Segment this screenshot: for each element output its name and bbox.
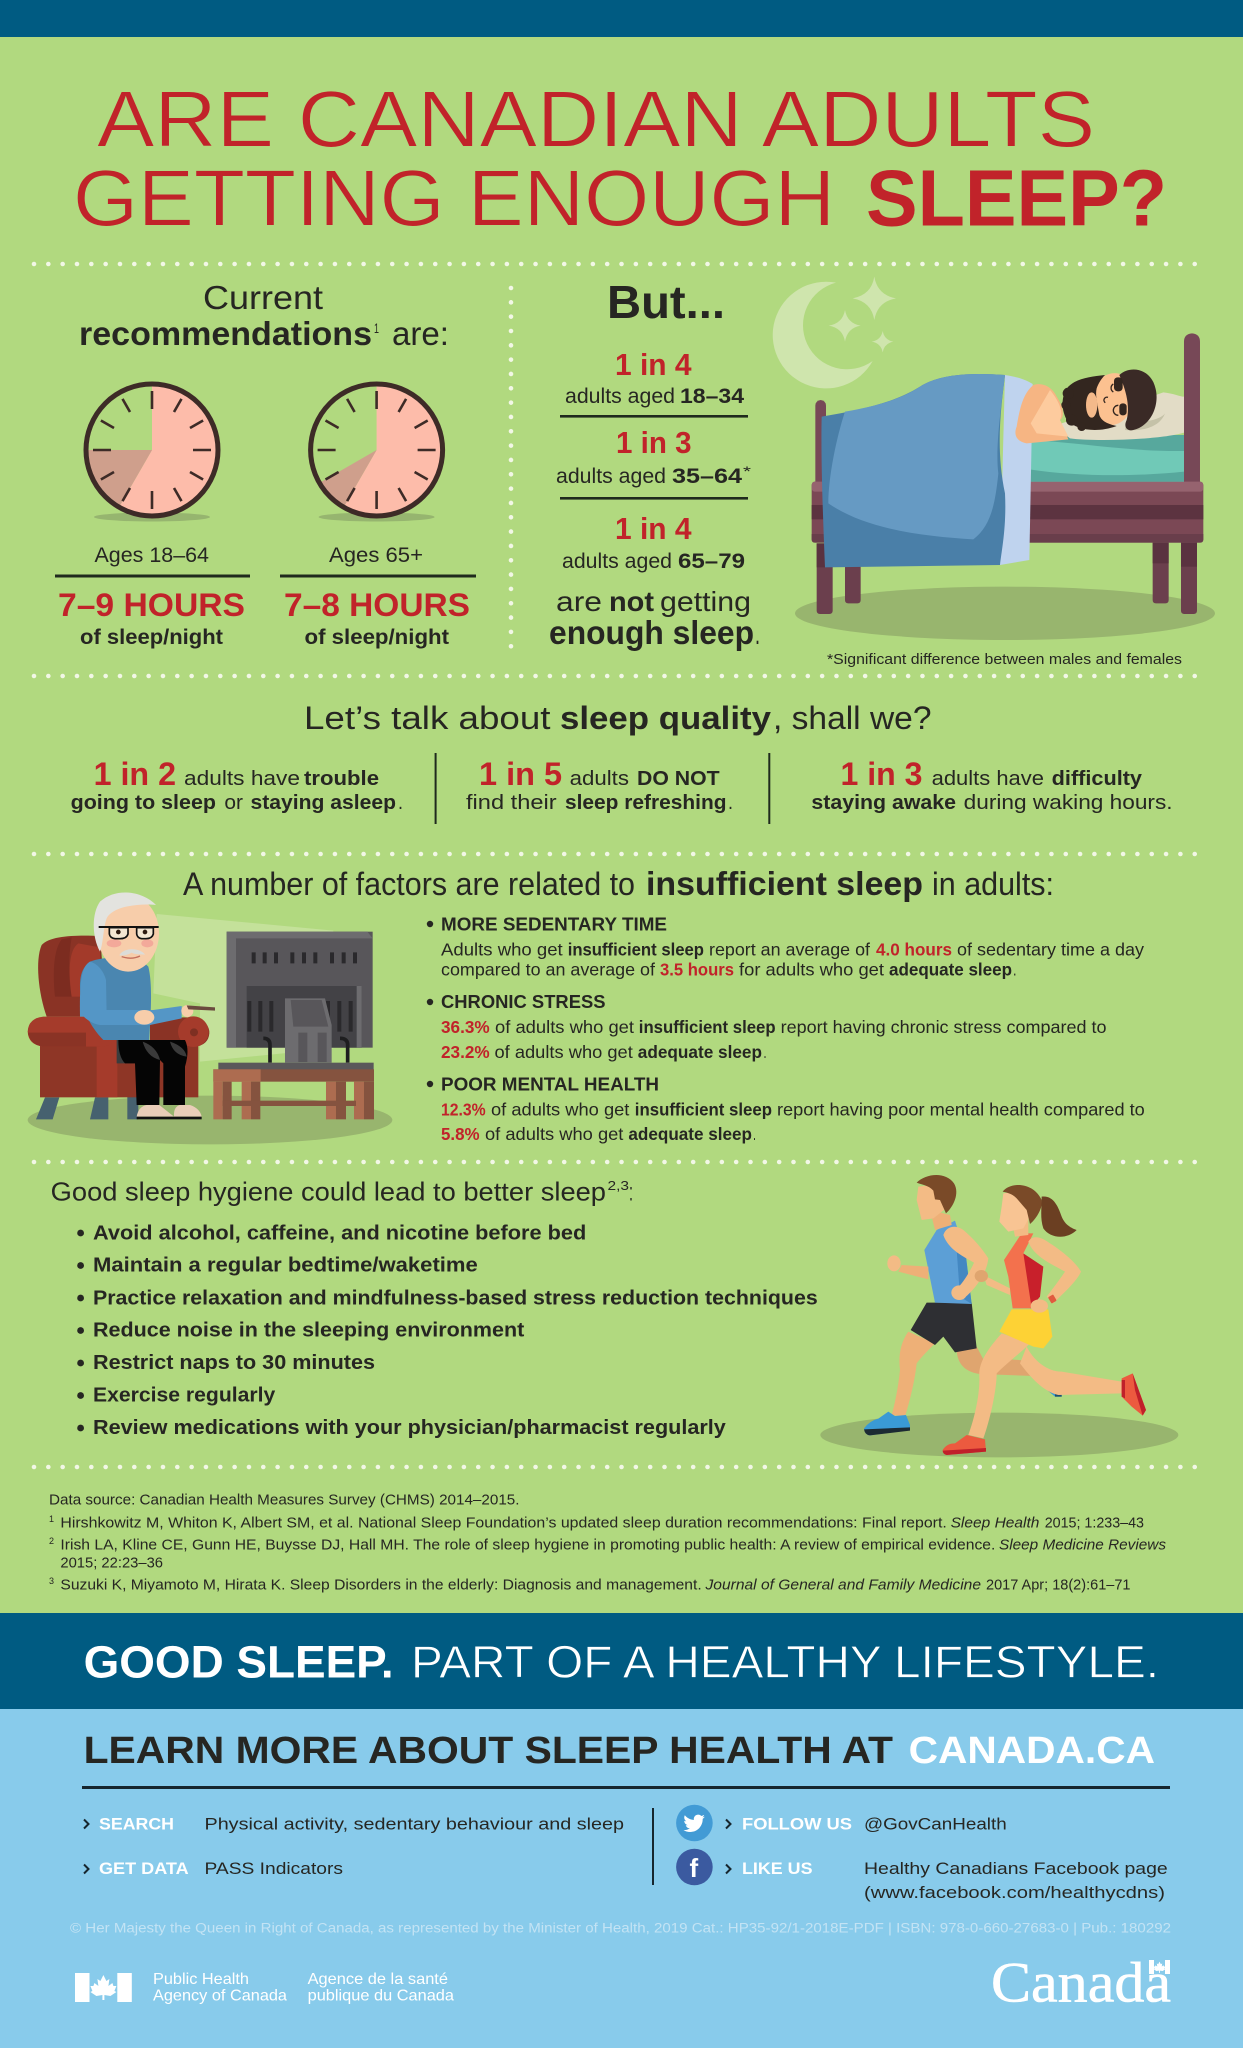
factor: poor mental health: adequate sleep <box>628 1124 752 1144</box>
factor: poor mental health: of adults who get <box>491 1100 630 1120</box>
stat: 1 in 4 aged 18-34 <box>560 347 748 418</box>
canada wordmark: Canada <box>991 1952 1171 2015</box>
recommendation: ages 65+ <box>280 544 476 649</box>
recommendations heading: 1 <box>374 320 379 336</box>
icon: running woman <box>943 1185 1146 1455</box>
list: hygiene tips: Practice relaxation and mindfulness-based stress reduction techniques <box>93 1286 818 1309</box>
icon: crescent moon and stars <box>773 277 896 388</box>
stat: 1 in 5 not refreshing: . <box>728 791 733 814</box>
link: like us <box>726 1859 1168 1902</box>
stat: 1 in 2 trouble sleeping <box>71 756 403 814</box>
reference 2: Irish LA, Kline CE, Gunn HE, Buysse DJ, Hall MH. The role of sleep hygiene in promoting public health: A review of empirical evidence. <box>60 1537 995 1553</box>
list: hygiene tips: Restrict naps to 30 minutes <box>93 1351 375 1374</box>
stat: 1 in 2 trouble sleeping: 1 in 2 <box>94 756 176 792</box>
icon: canadian flag <box>75 1973 132 2002</box>
stat: 1 in 2 trouble sleeping: . <box>398 791 403 814</box>
stat: 1 in 3 difficulty staying awake: difficulty <box>1052 767 1143 790</box>
stat: 1 in 3 difficulty staying awake: during waking hours. <box>964 791 1173 814</box>
icon: facebook: f <box>690 1853 698 1883</box>
heading: factors related to insufficient sleep: insufficient sleep <box>646 865 923 902</box>
factor: more sedentary time <box>427 915 1144 980</box>
agency name french <box>308 1971 454 2005</box>
icon: older man <box>80 892 215 1119</box>
link: get data: GET DATA <box>99 1859 189 1878</box>
icon: running man <box>864 1175 1062 1435</box>
title <box>73 75 1167 243</box>
icon: mattress <box>1029 435 1184 482</box>
recommendations heading: recommendations <box>79 315 372 352</box>
icon: facebook <box>676 1849 713 1885</box>
factor: poor mental health: POOR MENTAL HEALTH <box>441 1075 659 1095</box>
link: search: Physical activity, sedentary behaviour and sleep <box>204 1814 624 1833</box>
heading: factors related to insufficient sleep: in adults: <box>932 866 1054 902</box>
icon: arm <box>1015 384 1068 443</box>
list: hygiene tips: Exercise regularly <box>93 1384 276 1407</box>
icon: sleeping man's head <box>1061 369 1157 431</box>
factor: more sedentary time: for adults who get <box>739 960 884 980</box>
heading: learn more: CANADA.CA <box>909 1730 1155 1772</box>
statement: not getting enough sleep: are <box>556 586 602 617</box>
factor: poor mental health: 12.3% <box>441 1100 486 1120</box>
reference 3: Journal of General and Family Medicine <box>704 1577 981 1593</box>
illustration: man and woman running <box>820 1175 1178 1457</box>
link: follow us <box>726 1814 1007 1833</box>
recommendation: ages 18-64: of sleep/night <box>80 626 223 649</box>
factor: more sedentary time: . <box>1013 960 1016 980</box>
stat: 1 in 3 difficulty staying awake: 1 in 3 <box>840 756 922 792</box>
heading: sleep quality: sleep quality <box>560 700 771 736</box>
stat: 1 in 4 aged 18-34: 18–34 <box>680 385 744 408</box>
reference 1 <box>49 1514 1144 1531</box>
factor: chronic stress: 36.3% <box>441 1017 490 1037</box>
stat: 1 in 4 aged 18-34: 1 in 4 <box>615 347 692 382</box>
factor: poor mental health: insufficient sleep <box>635 1100 772 1120</box>
factor: more sedentary time: Adults who get <box>441 940 563 960</box>
stat: 1 in 2 trouble sleeping: trouble <box>304 767 379 790</box>
link: follow us: @GovCanHealth <box>864 1814 1007 1833</box>
link: like us: (www.facebook.com/healthycdns) <box>864 1883 1165 1902</box>
heading: sleep quality: Let’s talk about <box>304 700 551 736</box>
icon: clock 7 to 9 hours <box>86 384 218 522</box>
illustration: older man watching television <box>28 892 392 1144</box>
factor: poor mental health: of adults who get <box>485 1124 624 1144</box>
statement: not getting enough sleep: enough sleep <box>549 614 754 651</box>
agency name english <box>153 1971 287 2005</box>
icon: television <box>218 932 374 1070</box>
icon: tv table <box>213 1069 374 1119</box>
factor: chronic stress: of adults who get <box>494 1042 633 1062</box>
list: hygiene tips <box>77 1221 818 1439</box>
heading: good sleep hygiene: Good sleep hygiene could lead to better sleep <box>51 1177 606 1207</box>
stat: 1 in 3 aged 35-64: * <box>743 463 752 479</box>
link: like us: LIKE US <box>742 1859 812 1878</box>
stat: 1 in 3 difficulty staying awake: staying awake <box>811 791 956 814</box>
factor: more sedentary time: 3.5 hours <box>660 960 734 980</box>
recommendations heading <box>79 279 449 352</box>
recommendation: ages 18-64: 7–9 HOURS <box>58 587 245 623</box>
divider <box>652 1808 654 1885</box>
factor: more sedentary time: compared to an average of <box>441 960 655 980</box>
factor: poor mental health: 5.8% <box>441 1124 480 1144</box>
reference 3 <box>49 1576 1130 1593</box>
top band <box>0 0 1243 37</box>
copyright line: © Her Majesty the Queen in Right of Canada, as represented by the Minister of Health, 2019 Cat.: HP35-92/1-2018E-PDF | ISBN: 978-0-660-27683-0 | Pub.: 180292 <box>70 1921 1171 1936</box>
icon: armchair <box>28 936 209 1119</box>
reference 2: 2 <box>49 1536 54 1546</box>
factor: chronic stress <box>427 992 1106 1062</box>
icon: tv light beam <box>153 914 333 1062</box>
panel: learn more footer <box>0 1709 1243 2048</box>
recommendation: ages 18-64 <box>55 544 250 649</box>
title: ARE CANADIAN ADULTS <box>97 75 1095 164</box>
statement: not getting enough sleep: not <box>609 586 654 617</box>
heading: good sleep hygiene: 2,3 <box>608 1178 629 1193</box>
factor: chronic stress: 23.2% <box>441 1042 490 1062</box>
panel: but statistics <box>549 276 760 651</box>
factor: chronic stress: report having chronic stress compared to <box>781 1017 1106 1037</box>
link: search: SEARCH <box>99 1814 174 1833</box>
agency name english: Agency of Canada <box>153 1988 287 2005</box>
factor: chronic stress: of adults who get <box>495 1017 634 1037</box>
reference 3: 3 <box>49 1576 54 1586</box>
factor: chronic stress: . <box>764 1042 766 1062</box>
heading: factors related to insufficient sleep: A number of factors are related to <box>183 866 635 902</box>
stat: 1 in 4 aged 65-79: 65–79 <box>678 550 745 573</box>
list: hygiene tips: Avoid alcohol, caffeine, and nicotine before bed <box>93 1221 586 1244</box>
heading: sleep quality: , shall we? <box>773 700 932 736</box>
panel: current recommendations <box>55 279 476 649</box>
stat: 1 in 5 not refreshing: DO NOT <box>637 767 720 790</box>
stat: 1 in 4 aged 65-79 <box>562 511 745 573</box>
stat: 1 in 3 aged 35-64 <box>556 425 752 500</box>
stat: 1 in 2 trouble sleeping: or <box>224 791 243 814</box>
stat: 1 in 2 trouble sleeping: going to sleep <box>71 791 216 814</box>
recommendations heading: are: <box>392 315 449 352</box>
illustration: man sleeping in bed with moon and stars <box>773 277 1215 640</box>
factor: chronic stress: CHRONIC STRESS <box>441 992 606 1012</box>
banner: good sleep: PART OF A HEALTHY LIFESTYLE. <box>411 1637 1159 1688</box>
recommendations heading: Current <box>203 279 323 316</box>
agency name french: publique du Canada <box>308 1988 454 2005</box>
stat: 1 in 3 aged 35-64: 1 in 3 <box>616 425 692 460</box>
factor: poor mental health <box>427 1075 1145 1144</box>
stat: 1 in 5 not refreshing: 1 in 5 <box>479 756 562 792</box>
stat: 1 in 4 aged 65-79: 1 in 4 <box>615 511 692 546</box>
statement: not getting enough sleep: getting <box>660 586 751 617</box>
stat: 1 in 3 difficulty staying awake: adults have <box>932 767 1044 790</box>
title: GETTING ENOUGH <box>73 154 835 243</box>
factor: more sedentary time: of sedentary time a day <box>957 940 1144 960</box>
stat: 1 in 2 trouble sleeping: staying asleep <box>250 791 396 814</box>
stat: 1 in 2 trouble sleeping: adults have <box>184 767 300 790</box>
stat: 1 in 5 not refreshing <box>466 756 733 814</box>
title: SLEEP? <box>866 154 1167 243</box>
icon: blanket <box>821 374 1005 567</box>
references <box>49 1492 1166 1593</box>
icon: twitter <box>676 1805 713 1841</box>
panel: sleep quality <box>71 700 1173 824</box>
recommendation: ages 65+: Ages 65+ <box>329 544 423 567</box>
stat: 1 in 5 not refreshing: sleep refreshing <box>565 791 726 814</box>
stat: 1 in 3 aged 35-64: adults aged <box>556 465 666 488</box>
heading: But: But... <box>607 276 725 328</box>
panel: factors list <box>427 915 1145 1144</box>
reference 1: 1 <box>49 1514 54 1524</box>
stat: 1 in 4 aged 18-34: adults aged <box>565 385 675 408</box>
list: hygiene tips: Review medications with your physician/pharmacist regularly <box>93 1416 726 1439</box>
icon: floor shadow <box>28 1096 392 1144</box>
reference 2: Sleep Medicine Reviews <box>999 1537 1166 1553</box>
heading: factors related to insufficient sleep <box>183 865 1054 902</box>
factor: more sedentary time: MORE SEDENTARY TIME <box>441 915 667 935</box>
icon: ground shadow <box>820 1413 1178 1457</box>
link: get data <box>84 1859 343 1878</box>
agency name french: Agence de la santé <box>308 1971 448 1988</box>
reference 1: Sleep Health <box>951 1515 1039 1531</box>
agency name english: Public Health <box>153 1971 249 1988</box>
banner: good sleep: GOOD SLEEP. <box>84 1637 394 1688</box>
icon: bed frame <box>812 333 1203 614</box>
link: like us: Healthy Canadians Facebook page <box>864 1859 1168 1878</box>
factor: more sedentary time: 4.0 hours <box>876 940 952 960</box>
factor: more sedentary time: adequate sleep <box>889 960 1012 980</box>
heading: good sleep hygiene: : <box>629 1179 633 1207</box>
statement: not getting enough sleep: . <box>755 616 760 651</box>
factor: chronic stress: insufficient sleep <box>639 1017 776 1037</box>
factor: more sedentary time: report an average of <box>709 940 870 960</box>
reference 1: 2015; 1:233–43 <box>1045 1515 1144 1531</box>
recommendation: ages 18-64: Ages 18–64 <box>94 544 209 567</box>
reference 1: Hirshkowitz M, Whiton K, Albert SM, et al. National Sleep Foundation’s updated sleep duration recommendations: Final report. <box>60 1515 947 1531</box>
factor: more sedentary time: insufficient sleep <box>568 940 704 960</box>
panel: sleep hygiene <box>51 1177 818 1439</box>
icon: pillow <box>1062 392 1184 440</box>
factor: poor mental health: . <box>753 1124 756 1144</box>
link: get data: PASS Indicators <box>204 1859 343 1878</box>
factor: poor mental health: report having poor mental health compared to <box>777 1100 1145 1120</box>
stat: 1 in 4 aged 65-79: adults aged <box>562 550 672 573</box>
heading: sleep quality <box>304 700 932 736</box>
footnote: significant difference: *Significant difference between males and females <box>827 651 1182 668</box>
recommendation: ages 65+: of sleep/night <box>304 626 449 649</box>
icon: ground shadow <box>795 587 1215 640</box>
reference 2: 2015; 22:23–36 <box>60 1555 163 1571</box>
divider <box>435 753 437 824</box>
list: hygiene tips: Reduce noise in the sleeping environment <box>93 1319 524 1342</box>
heading: learn more <box>82 1730 1170 1789</box>
link: follow us: FOLLOW US <box>742 1814 852 1833</box>
stat: 1 in 5 not refreshing: find their <box>466 791 557 814</box>
list: hygiene tips: Maintain a regular bedtime/waketime <box>93 1254 478 1277</box>
divider <box>768 753 770 824</box>
recommendation: ages 65+: 7–8 HOURS <box>284 587 470 623</box>
reference 3: 2017 Apr; 18(2):61–71 <box>986 1577 1130 1593</box>
banner: good sleep <box>0 1613 1243 1709</box>
icon: clock 7 to 8 hours <box>311 384 443 522</box>
data source: Data source: Canadian Health Measures Survey (CHMS) 2014–2015. <box>49 1492 520 1508</box>
stat: 1 in 3 difficulty staying awake <box>811 756 1173 814</box>
link: search <box>84 1814 624 1833</box>
heading: learn more: LEARN MORE ABOUT SLEEP HEALTH AT <box>84 1730 893 1772</box>
stat: 1 in 5 not refreshing: adults <box>570 767 629 790</box>
icon: bed sheet <box>1000 375 1033 565</box>
reference 3: Suzuki K, Miyamoto M, Hirata K. Sleep Disorders in the elderly: Diagnosis and management. <box>60 1577 702 1593</box>
reference 2 <box>49 1536 1166 1571</box>
factor: chronic stress: adequate sleep <box>638 1042 762 1062</box>
statement: not getting enough sleep <box>549 586 760 651</box>
stat: 1 in 3 aged 35-64: 35–64 <box>672 465 742 488</box>
